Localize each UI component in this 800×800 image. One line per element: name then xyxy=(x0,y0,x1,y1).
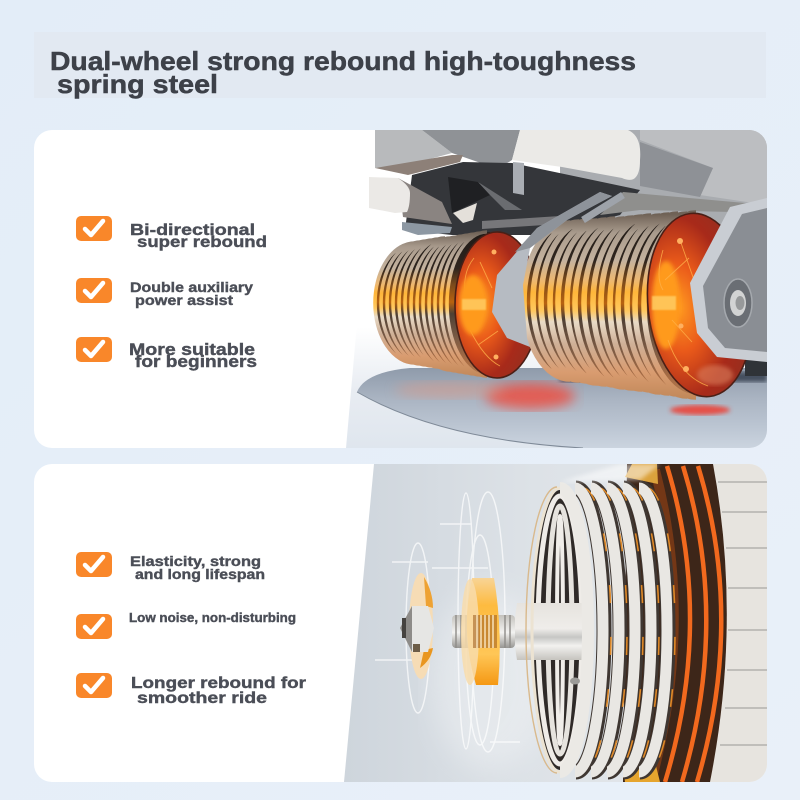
text: double auxiliary power assist: power assist xyxy=(135,292,233,308)
coil rings xyxy=(575,488,675,772)
text: bi-directional super rebound: Bi-directional xyxy=(130,222,255,239)
icon: orange check xyxy=(76,673,112,698)
feature: double auxiliary xyxy=(76,278,253,308)
coil interior stripes xyxy=(534,490,582,770)
shaft xyxy=(514,603,587,660)
text: double auxiliary power assist xyxy=(130,279,253,308)
feature: low noise xyxy=(76,611,296,639)
title: Dual-wheel strong rebound high-toughness xyxy=(50,46,636,76)
icon: orange check xyxy=(76,552,112,577)
panel: spring components xyxy=(34,464,767,782)
text: double auxiliary power assist: Double auxiliary xyxy=(130,279,253,295)
icon: orange check xyxy=(76,337,112,362)
product image: exploded spring xyxy=(344,464,767,782)
right fork arm inner xyxy=(703,208,767,352)
left end cap xyxy=(400,573,434,679)
feature: elasticity xyxy=(76,552,265,582)
icon: orange check xyxy=(76,278,112,303)
left spring wheel xyxy=(375,232,497,378)
right fork arm xyxy=(690,198,767,362)
text: elasticity, strong and long lifespan xyxy=(130,553,265,582)
panel: dual wheels xyxy=(34,130,767,448)
glow across coil top xyxy=(560,464,660,482)
front ring xyxy=(526,487,588,773)
outer shell segments xyxy=(710,464,767,782)
bolt xyxy=(724,279,752,327)
text: more suitable for beginners xyxy=(129,341,257,371)
copper band xyxy=(622,464,727,782)
feature: more suitable xyxy=(76,337,257,371)
text: bi-directional super rebound xyxy=(130,222,267,251)
base disc xyxy=(357,368,767,448)
icon: orange check xyxy=(76,614,112,639)
image background xyxy=(344,464,627,782)
text: low noise: Low noise, non-disturbing xyxy=(129,611,296,625)
right wheel glowing disk xyxy=(646,212,746,398)
machine frame xyxy=(369,130,767,376)
threaded bolt xyxy=(452,615,515,648)
text: longer rebound for smoother ride: smoother ride xyxy=(137,690,267,707)
left wheel glowing disk xyxy=(455,232,539,378)
text: longer rebound for smoother ride xyxy=(131,675,306,707)
feature: bi-directional xyxy=(76,216,267,251)
panel card xyxy=(34,464,767,782)
faint halo rings xyxy=(375,492,520,752)
panel card xyxy=(34,130,767,448)
centre support arm xyxy=(492,192,623,347)
text: bi-directional super rebound: super rebound xyxy=(137,234,267,251)
text: elasticity, strong and long lifespan: Elasticity, strong xyxy=(130,553,261,569)
soft glow xyxy=(436,602,534,760)
text: more suitable for beginners: for beginners xyxy=(135,353,257,371)
text: more suitable for beginners: More suitable xyxy=(129,341,255,359)
title band xyxy=(34,32,766,98)
right spring wheel xyxy=(524,213,702,397)
text: longer rebound for smoother ride: Longer rebound for xyxy=(131,675,306,692)
image floor xyxy=(346,350,745,448)
icon: orange check xyxy=(76,216,112,241)
product image: dual spring wheels xyxy=(346,130,767,448)
orange nut xyxy=(461,578,500,685)
title xyxy=(50,46,636,99)
title: spring steel xyxy=(57,69,218,99)
feature: longer rebound xyxy=(76,673,306,707)
text: elasticity, strong and long lifespan: and long lifespan xyxy=(135,566,265,582)
